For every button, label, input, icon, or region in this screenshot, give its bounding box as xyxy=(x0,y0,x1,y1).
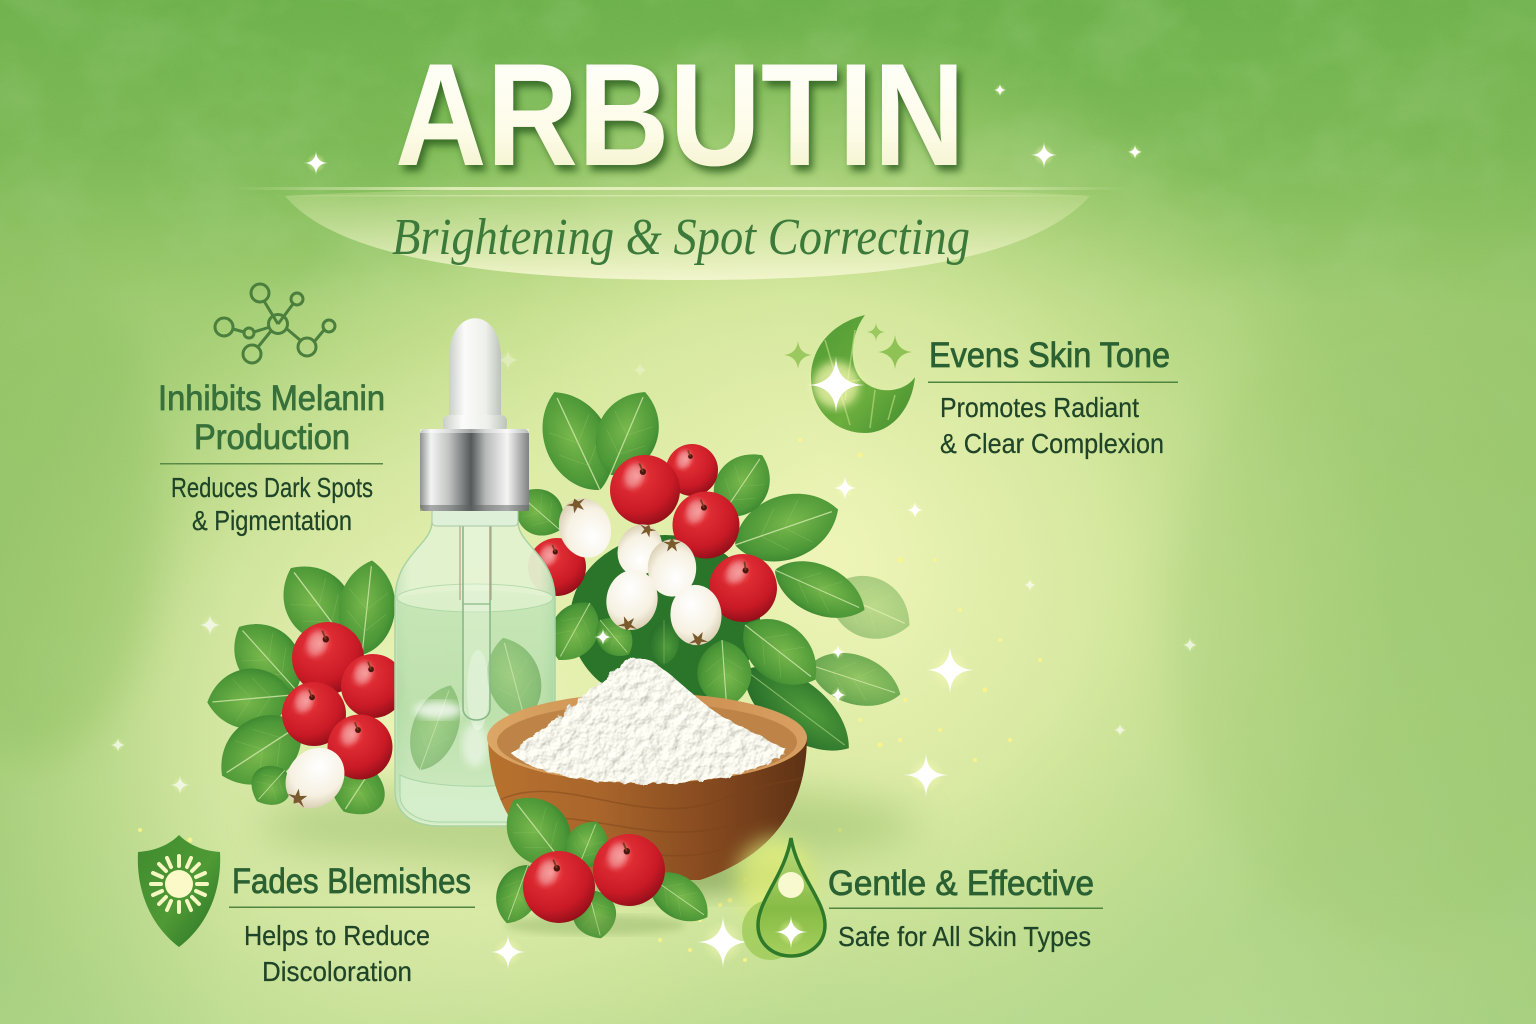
icon: shield with sun xyxy=(138,835,220,947)
panel: evens skin tone: Evens Skin Tone xyxy=(929,336,1170,375)
left leaves and berries xyxy=(205,549,405,827)
panel: evens skin tone xyxy=(784,315,1178,459)
front berries xyxy=(487,781,719,944)
panel: fades blemishes: Discoloration xyxy=(262,956,412,987)
title: ARBUTIN xyxy=(395,33,965,196)
serum dropper bottle xyxy=(395,318,555,826)
sparkles background xyxy=(110,83,1198,970)
wooden bowl with powder xyxy=(487,658,810,896)
reflected leaves xyxy=(399,631,550,778)
panel: inhibits melanin xyxy=(158,284,385,536)
illustration: leaves and berries behind bottle xyxy=(260,379,922,870)
bottle body xyxy=(395,522,555,826)
icon: crescent moon xyxy=(784,315,915,433)
subtitle: Brightening & Spot Correcting xyxy=(392,209,970,266)
silver cap xyxy=(420,429,529,511)
title banner xyxy=(230,187,1130,280)
neck xyxy=(432,508,518,526)
panel: fades blemishes xyxy=(138,835,475,987)
panel: evens skin tone: & Clear Complexion xyxy=(940,428,1164,459)
powder pile xyxy=(510,658,787,784)
panel: gentle and effective: Safe for All Skin Types xyxy=(838,921,1091,952)
icon: molecule xyxy=(215,284,335,363)
panel: gentle and effective xyxy=(737,838,1103,960)
pipette xyxy=(463,510,490,720)
liquid xyxy=(397,590,553,824)
bulb xyxy=(449,318,501,425)
icon: oil drop xyxy=(737,838,825,960)
panel: fades blemishes: Helps to Reduce xyxy=(244,920,430,951)
panel: gentle and effective: Gentle & Effective xyxy=(828,864,1094,903)
heading: Inhibits Melanin xyxy=(158,379,385,418)
bottle backing xyxy=(395,522,555,826)
panel: inhibits melanin: & Pigmentation xyxy=(192,505,352,536)
panel: evens skin tone: Promotes Radiant xyxy=(940,392,1139,423)
panel: fades blemishes: Fades Blemishes xyxy=(232,862,471,901)
panel: inhibits melanin: Production xyxy=(194,418,350,457)
soft shadow xyxy=(260,780,920,870)
description: Reduces Dark Spots xyxy=(171,472,373,503)
